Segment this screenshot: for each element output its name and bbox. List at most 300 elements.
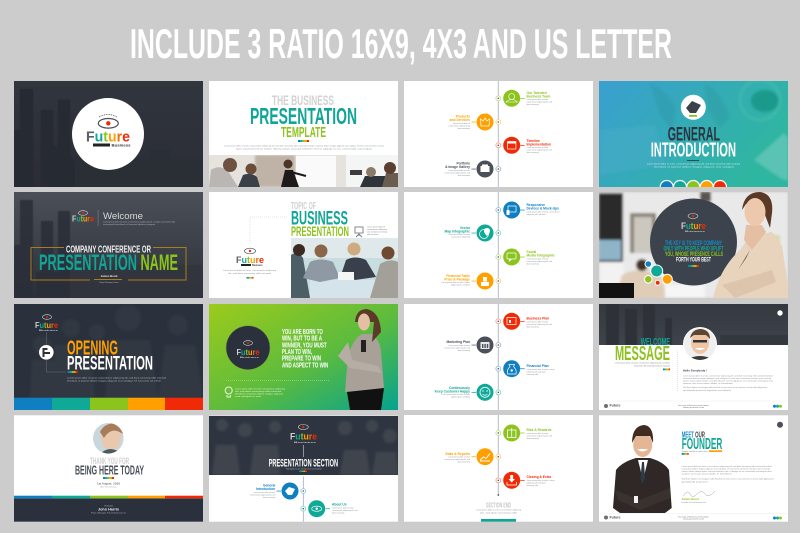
- body text: [224, 144, 384, 150]
- greeting: Hello Everybody !: [683, 368, 707, 372]
- logo eye: [98, 114, 118, 128]
- icon: handshake circle: [282, 482, 298, 500]
- heading line 1: GENERAL: [668, 124, 720, 146]
- panel: presentation section: [209, 416, 398, 522]
- photo: blurred office: [599, 192, 788, 298]
- heading: Introduction: [256, 487, 275, 491]
- founder portrait: [613, 425, 672, 513]
- panel background: [14, 415, 203, 522]
- icon: eye circle: [308, 500, 325, 517]
- heading: and Services: [450, 118, 470, 122]
- heading: Financial Plan: [526, 364, 549, 368]
- icon: map circle: [476, 224, 494, 242]
- dotted divider: [226, 380, 330, 382]
- logo tagline: Business: [240, 357, 261, 359]
- dotted connector: [250, 217, 287, 241]
- heading line 2: BEING HERE TODAY: [75, 462, 144, 477]
- logo eye: [42, 315, 52, 319]
- panel: timeline team and services: [404, 81, 593, 187]
- skyline photo: [14, 200, 70, 280]
- photo: desk and keyboard: [600, 80, 788, 181]
- footer logo: Future: [610, 516, 621, 520]
- logo wordmark: Future: [236, 255, 264, 265]
- logo circle: [72, 98, 144, 170]
- side text: consectetuer adipiscing: [367, 228, 387, 231]
- quote text: [664, 241, 724, 264]
- quote text: AND ASPECT TO WIN: [282, 360, 328, 369]
- founder name: James Bond: [682, 497, 699, 501]
- node: [496, 96, 501, 101]
- item: financial table: [442, 272, 501, 290]
- woman portrait: [713, 192, 788, 298]
- description: Lorem ipsum dolor sit amet: [526, 432, 549, 435]
- message text: exerci tation ullamcorper suscipit lobortis nisl ut aliquip ex ea commodo consequat duis: [683, 380, 773, 382]
- timeline axis: [498, 415, 499, 495]
- panel: welcome message: [599, 304, 788, 410]
- panel: timeline devices and maps: [404, 192, 593, 298]
- connector: [472, 344, 476, 346]
- body text: Lorem ipsum dolor sit amet, consectetuer adipiscing elit, sed diam nonummy nibh euismod: [67, 376, 166, 380]
- bottom dark desk: [599, 283, 634, 298]
- description: Lorem ipsum dolor sit amet: [448, 456, 470, 458]
- biography text: ut laoreet dolore magna aliquam erat volutpat. Ut wisi enim ad minim veniam, quis nostrud: [682, 468, 770, 470]
- node: [496, 279, 501, 283]
- description: Lorem ipsum dolor sit amet, consec: [526, 479, 555, 482]
- quote text: YOU, WHOSE PRESENCE CALLS: [665, 252, 723, 258]
- node: [496, 231, 501, 235]
- panel: welcome conference title: [14, 192, 203, 298]
- heading: Financial Table: [446, 274, 470, 278]
- description: diam nonummy: [263, 497, 275, 499]
- logo: [236, 248, 264, 267]
- footer text: www.yoursite.com: [683, 406, 705, 409]
- icon: board circle: [503, 313, 520, 330]
- footer logo: Future: [610, 404, 621, 408]
- connector: [472, 168, 476, 170]
- heading line 1: OPENING: [67, 337, 118, 359]
- item: timeline implementation: [496, 137, 552, 154]
- description: Lorem ipsum dolor sit amet: [448, 344, 470, 347]
- timeline axis: [498, 192, 499, 298]
- panel background: [404, 304, 593, 410]
- presenter: [94, 275, 122, 284]
- panel background: [14, 192, 203, 298]
- subtitle: COMPANY CONFERENCE OR: [66, 244, 151, 256]
- description: adipiscing elit, sed diam: [526, 482, 546, 485]
- connector line: [46, 332, 66, 372]
- heading line 1: TOPIC OF: [291, 201, 316, 212]
- panel: meet our founder: [599, 415, 788, 522]
- logo wordmark: Future: [86, 128, 130, 146]
- side text: nibh euismod: [367, 234, 378, 236]
- panel: thank you: [14, 415, 203, 522]
- photo: team at table: [291, 238, 398, 298]
- description: diam nonummy: [526, 104, 539, 106]
- connector: [520, 97, 525, 100]
- logo tagline: Business: [294, 442, 318, 444]
- logo eye: [244, 248, 256, 254]
- connector: [276, 490, 281, 492]
- timeline axis: [498, 304, 499, 410]
- woman portrait: [338, 309, 384, 410]
- description: consectetuer adipiscing elit, sed: [526, 434, 552, 438]
- panel background: [209, 416, 398, 522]
- footer text: Your topic of Business presentation: [678, 515, 709, 518]
- item: closing and extra: [496, 472, 555, 489]
- rainbow bar: [103, 477, 114, 479]
- description: consectetuer adipiscing elit: [448, 124, 470, 128]
- description: Lorem ipsum dolor sit amet, consectetuer adipiscing: [223, 269, 276, 272]
- heading line 2: MESSAGE: [615, 343, 670, 365]
- description: nonummy nibh: [526, 485, 538, 487]
- connector: [326, 507, 330, 510]
- description: Lorem ipsum dolor sit amet, consec: [442, 281, 470, 284]
- heading line 3: PRESENTATION: [291, 223, 349, 239]
- rainbow bar: [682, 453, 689, 455]
- heading: Keep Customer Happy: [435, 390, 470, 394]
- heading: Our Talented: [526, 91, 547, 95]
- heading: Stats & Reports: [445, 452, 470, 456]
- heading: Risk & Rewards: [526, 428, 552, 432]
- quote text: PREPARE TO WIN: [282, 354, 321, 363]
- panel: motivational quote: [209, 304, 398, 410]
- quote text: FORTH YOUR BEST: [676, 258, 711, 264]
- panel: quote with businesswoman: [599, 192, 788, 298]
- logo wordmark: Future: [236, 348, 260, 357]
- description: consectetuer adipiscing elit, sed: [526, 323, 552, 326]
- quote text: THE KEY IS TO KEEP COMPANY: [665, 241, 722, 247]
- item: keep customer happy: [435, 384, 501, 401]
- heading line 2: PRESENTATION: [250, 103, 357, 129]
- item: business team: [496, 90, 552, 107]
- item: social media infographic: [496, 248, 555, 266]
- small badge: [777, 310, 783, 316]
- portrait photo: [93, 423, 124, 454]
- node: [496, 143, 501, 148]
- icon: handshake badge: [681, 95, 706, 120]
- message text: Vel illum dolore eu feugiat nulla facilisis at vero eros et accumsan et iusto odio dignissim: [683, 386, 767, 389]
- body text: Lorem ipsum dolor sit amet, consectetuer adipiscing elit, sed diam nonummy nibh euismod: [647, 162, 740, 166]
- heading: Map Infographic: [445, 230, 470, 234]
- panel: timeline risk and stats: [404, 415, 593, 522]
- section title: PRESENTATION SECTION: [269, 458, 338, 470]
- intro text: Lorem ipsum dolor sit amet, consectetuer adipiscing elit, sed diam: [615, 362, 670, 364]
- connector: [472, 455, 476, 458]
- rainbow bar: [246, 277, 254, 279]
- panel: opening presentation: [14, 304, 203, 410]
- panel background: [209, 81, 398, 187]
- connector: [520, 432, 525, 434]
- logo eye: [244, 341, 252, 345]
- heading line 3: TEMPLATE: [281, 124, 326, 141]
- description: Lorem ipsum dolor sit amet: [448, 169, 470, 172]
- description: consectetuer adipiscing elit, sed: [526, 148, 552, 152]
- item: portfolio and image gallery: [445, 160, 501, 178]
- connector: [472, 391, 476, 394]
- quote text: PLAN TO WIN,: [282, 347, 312, 356]
- heading: Marketing Plan: [447, 340, 470, 344]
- logo tagline: Business: [112, 144, 131, 148]
- description: Lorem ipsum dolor sit amet: [526, 98, 549, 101]
- description: Lorem ipsum dolor sit amet: [254, 491, 276, 494]
- item: stats and reports: [445, 448, 501, 465]
- logo: [236, 341, 261, 359]
- panel: business presentation template: [209, 81, 398, 187]
- logo tagline: Business: [39, 330, 60, 332]
- heading line 1: THANK YOU FOR: [90, 456, 129, 466]
- description: diam nonummy: [458, 350, 470, 352]
- description: adipiscing elit, sed diam: [526, 213, 546, 216]
- panel background: [404, 81, 593, 187]
- heading line 2: FOUNDER: [682, 436, 723, 453]
- rainbow bar: [68, 371, 78, 373]
- connector: [520, 256, 525, 258]
- timeline axis: [498, 81, 499, 187]
- description: adipiscing elit, sed diam: [451, 284, 471, 286]
- teal button: [481, 519, 516, 522]
- quote text: [282, 327, 328, 369]
- orange accent: [709, 450, 722, 452]
- heading: Implementation: [526, 142, 551, 146]
- biography text: Lorem ipsum dolor sit amet, consectetuer adipiscing elit, sed diam nonummy nibh euismod tincidunt: [682, 465, 772, 468]
- heading line 1: THE BUSINESS: [272, 92, 334, 108]
- node: [301, 489, 306, 493]
- icon: money stack circle: [476, 272, 494, 290]
- presenter: Project Manager, Future Business Ltd.: [91, 512, 127, 514]
- panel background: [14, 81, 203, 187]
- footer logo: [604, 516, 621, 520]
- colour band: [14, 398, 203, 410]
- small badge: [777, 422, 783, 428]
- node: [496, 319, 501, 324]
- biography text: Vel illum dolore eu feugiat nulla facilisis at vero eros et accumsan et iusto odio dignissim: [682, 478, 774, 480]
- panel: timeline business plans: [404, 304, 593, 410]
- heading line 1: MEET OUR: [682, 430, 705, 439]
- description: elit, sed diam nonummy nibh euismod: [228, 272, 271, 275]
- axis end dot: [497, 494, 499, 496]
- item: about us: [301, 500, 357, 517]
- divider: [98, 210, 99, 226]
- item: responsive devices: [496, 202, 560, 218]
- description: diam nonummy: [332, 512, 344, 514]
- founder title: Founder, Future Business Inc.: [682, 501, 707, 504]
- message text: ut laoreet dolore magna aliquam erat volutpat. Ut wisi enim ad minim veniam, quis nostrud: [683, 377, 771, 380]
- icon: smiley circle: [476, 384, 494, 401]
- logo disc: [226, 326, 270, 370]
- body text: quis nostrud exerci tation ullamcorper suscipit lobortis nisl ut aliquip ex ea commodo consequat: [236, 148, 373, 150]
- description: consectetuer adipiscing elit, sed: [526, 100, 552, 104]
- body text: Lorem ipsum dolor sit amet, consectetuer adipiscing elit, sed diam nonummy nibh euismod tincidunt ut laoreet dolore magna aliquam erat volutpat. Ut wisi enim ad minim veniam: [224, 144, 384, 148]
- side text: Lorem ipsum dolor sit: [367, 226, 386, 228]
- colour strip: [14, 496, 203, 498]
- node: [496, 454, 501, 459]
- heading: About Us: [332, 503, 347, 507]
- icon: light bulb: [225, 387, 232, 397]
- node: [496, 120, 501, 124]
- body text: tincidunt ut laoreet dolore magna aliquam erat volutpat. Ut wisi enim ad minim: [67, 380, 161, 382]
- presenter: Presented: [104, 504, 113, 508]
- logo: [35, 315, 60, 332]
- connector: [520, 367, 525, 370]
- heading: Vector: [460, 226, 471, 230]
- connector: [472, 121, 476, 123]
- biography text: exerci tation ullamcorper suscipit lobortis nisl ut aliquip ex ea commodo consequat duis: [682, 470, 772, 473]
- description: adipiscing elit, sed diam: [451, 396, 471, 398]
- node: [496, 167, 501, 171]
- logo tagline: Business: [685, 231, 707, 233]
- description: consectetuer adipiscing elit, sed: [332, 509, 357, 512]
- description: diam nonummy: [458, 175, 470, 177]
- description: consectetuer adipiscing elit, sed: [445, 172, 470, 174]
- quote text: YOU ARE BORN TO: [282, 327, 323, 336]
- icon: bars circle: [476, 336, 494, 354]
- connector: [472, 232, 476, 234]
- panel background: [599, 81, 788, 187]
- section end heading: SECTION END: [486, 502, 511, 510]
- heading line 1: WELCOME: [641, 336, 670, 348]
- heading: Responsive: [526, 203, 545, 207]
- icon: chart circle: [476, 448, 494, 465]
- description: Lorem ipsum dolor sit amet, consectetuer: [526, 210, 560, 214]
- heading: Closing & Extra: [526, 475, 551, 479]
- description: consectetuer adipiscing elit, sed: [445, 346, 470, 350]
- footer dots: [773, 405, 782, 408]
- rainbow bar: [299, 470, 307, 472]
- colour circles: [660, 180, 728, 187]
- date: 1st August, 2016: [97, 482, 120, 486]
- message text: autem vel eum iriure dolor in hendrerit: [683, 382, 734, 385]
- logo eye: [298, 424, 308, 430]
- description: consectetuer adipiscing: [451, 236, 470, 238]
- logo: [72, 210, 94, 222]
- presenter: John Harris: [98, 508, 119, 512]
- heading: Devices & Mock-Ups: [526, 207, 559, 211]
- body text: tincidunt ut laoreet dolore magna aliquam erat volutpat: [654, 166, 735, 168]
- footnote text: erat volutpat ut wisi: [235, 395, 262, 398]
- heading line 2: BUSINESS: [291, 208, 348, 230]
- connector: [520, 209, 525, 211]
- icon: money bag circle: [503, 360, 520, 377]
- description: consectetuer adipiscing elit, sed: [526, 260, 552, 263]
- presenter: Project Manager, Future: [99, 281, 119, 284]
- panel: logo cover slide: [14, 81, 203, 187]
- icon: team circle: [503, 90, 520, 107]
- heading: Continuously: [449, 386, 470, 390]
- panel background: [404, 415, 593, 522]
- footnote text: tincidunt ut laoreet dolore magna aliquam: [235, 392, 284, 396]
- message text: qui blandit praesent luptatum zzril delenit: [683, 389, 732, 392]
- heading: Portfolio: [456, 162, 470, 166]
- main title: PRESENTATION NAME: [39, 250, 178, 275]
- logo wordmark: Future: [290, 432, 317, 442]
- item: marketing plan: [445, 336, 501, 354]
- heading: Social: [526, 250, 536, 254]
- description: nonummy nibh: [526, 374, 538, 376]
- logo eye: [78, 211, 88, 215]
- section end text: elit, sed diam nonummy nibh: [480, 512, 517, 514]
- photo: faded team: [30, 305, 203, 398]
- section end text: Lorem ipsum dolor sit amet, consectetuer adipiscing: [476, 508, 521, 512]
- description: diam nonummy: [458, 462, 470, 464]
- logo wordmark: Future: [72, 214, 94, 224]
- node: [496, 255, 501, 259]
- heading: Business Team: [526, 94, 551, 98]
- logo: [290, 424, 318, 444]
- item: financial plan: [496, 360, 555, 377]
- logo wordmark: Future: [681, 221, 706, 231]
- rainbow bar: [298, 140, 309, 142]
- description: Lorem ipsum dolor sit amet: [332, 506, 354, 510]
- message text: Lorem ipsum dolor sit amet, consectetuer adipiscing elit, sed diam nonummy nibh euismod tincidunt: [683, 374, 773, 378]
- logo: [681, 214, 707, 233]
- panel background: [209, 192, 398, 298]
- description: diam nonummy: [526, 152, 539, 154]
- item: products and services: [448, 114, 501, 130]
- panel: general introduction: [599, 80, 788, 194]
- subtitle: Sample word for our place here: [682, 451, 708, 453]
- footnote text: elit, sed diam nonummy nibh euismod: [235, 390, 281, 393]
- divider: [302, 445, 305, 457]
- node: [496, 431, 501, 435]
- item: vector map infographic: [445, 224, 501, 242]
- icon: presentation board: [355, 227, 363, 237]
- welcome heading: Welcome: [103, 211, 143, 221]
- panel background: [599, 415, 788, 522]
- welcome text: Lorem ipsum dolor sit amet, consectetuer adipiscing elit, sed diam nonummy nibh: [103, 220, 175, 224]
- presenter: James Bond: [101, 274, 118, 278]
- logo wordmark: Future: [35, 321, 59, 330]
- heading: Price & Package: [444, 277, 470, 281]
- logo tagline: Business: [252, 264, 263, 267]
- logo: [86, 114, 131, 148]
- quote text: WIN, BUT TO BE A: [282, 334, 322, 343]
- logo eye: [688, 214, 698, 218]
- header photo: audience: [209, 416, 398, 475]
- description: consectetuer adipiscing elit, sed: [445, 458, 470, 461]
- connector: [520, 320, 525, 323]
- dotted divider: [677, 350, 679, 392]
- heading line 2: PRESENTATION: [67, 353, 153, 374]
- section subtitle: Sample text of the presentation: [286, 467, 322, 470]
- icon: presentation badge: [39, 345, 54, 360]
- presenter: [91, 504, 127, 514]
- description: Lorem ipsum dolor sit amet: [526, 258, 549, 260]
- node: [496, 390, 501, 395]
- footer text: Your topic of Business presentation: [678, 404, 709, 407]
- panel background: [209, 304, 398, 410]
- quote circle: [650, 198, 737, 286]
- connector: [520, 144, 525, 147]
- panel: topic of business presentation: [209, 192, 398, 298]
- colour bubbles: [644, 261, 672, 285]
- biography text: autem vel eum iriure dolor in hendrerit: [682, 472, 732, 476]
- footer rule: [599, 400, 788, 402]
- dash: [687, 160, 699, 161]
- header photo: skyline: [599, 304, 788, 345]
- footer band: [14, 498, 203, 522]
- footer dots: [773, 516, 782, 520]
- side text: elit, sed diam nonummy: [367, 230, 387, 234]
- welcome text: euismod tincidunt ut laoreet dolore magna: [103, 223, 155, 226]
- skyline photo: [14, 89, 70, 147]
- item: general introduction: [250, 482, 306, 500]
- connector: [520, 479, 525, 482]
- footer text: www.yoursite.com: [683, 518, 705, 520]
- description: Lorem ipsum dolor sit amet, consec: [526, 368, 555, 371]
- icon: timeline circle: [503, 137, 520, 154]
- heading: Timeline: [526, 139, 540, 143]
- panel background: [14, 304, 203, 410]
